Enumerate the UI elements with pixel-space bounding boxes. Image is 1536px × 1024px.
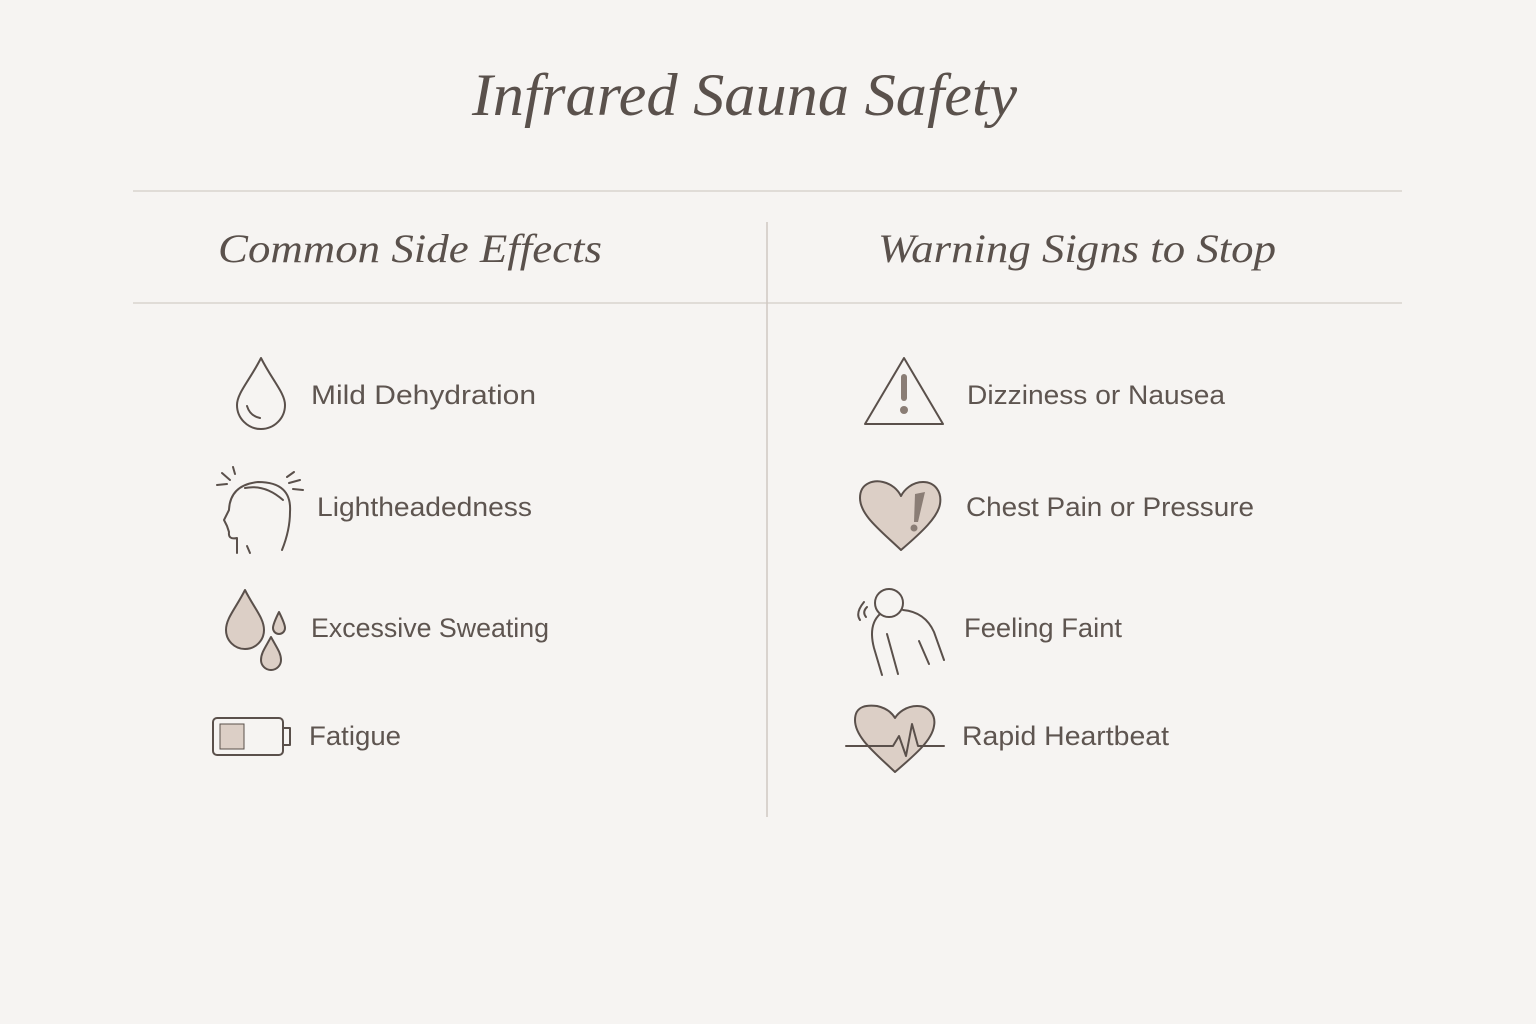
icon: head [217, 467, 303, 553]
icon: low battery [213, 718, 290, 755]
panel: common side effects [213, 358, 549, 755]
icon: heart alert [860, 481, 940, 550]
icon: fainting person [858, 589, 944, 675]
icon: sweat drops [226, 590, 285, 670]
icon: warning triangle [865, 358, 943, 424]
text: rapid heartbeat: Rapid Heartbeat [962, 721, 1170, 751]
heading: warning signs: Warning Signs to Stop [878, 226, 1276, 271]
text: dizziness: Dizziness or Nausea [967, 380, 1226, 410]
text: fatigue: Fatigue [309, 721, 401, 751]
icon: heartbeat [846, 706, 944, 772]
text: mild dehydration: Mild Dehydration [311, 380, 536, 410]
text: excessive sweating: Excessive Sweating [311, 613, 549, 643]
icon: water drop [237, 358, 285, 429]
title: Infrared Sauna Safety [471, 62, 1017, 128]
text: feeling faint: Feeling Faint [964, 613, 1122, 643]
text: lightheadedness: Lightheadedness [317, 492, 532, 522]
panel: warning signs [846, 358, 1254, 772]
heading: common side effects: Common Side Effects [218, 226, 602, 271]
text: chest pain: Chest Pain or Pressure [966, 492, 1254, 522]
